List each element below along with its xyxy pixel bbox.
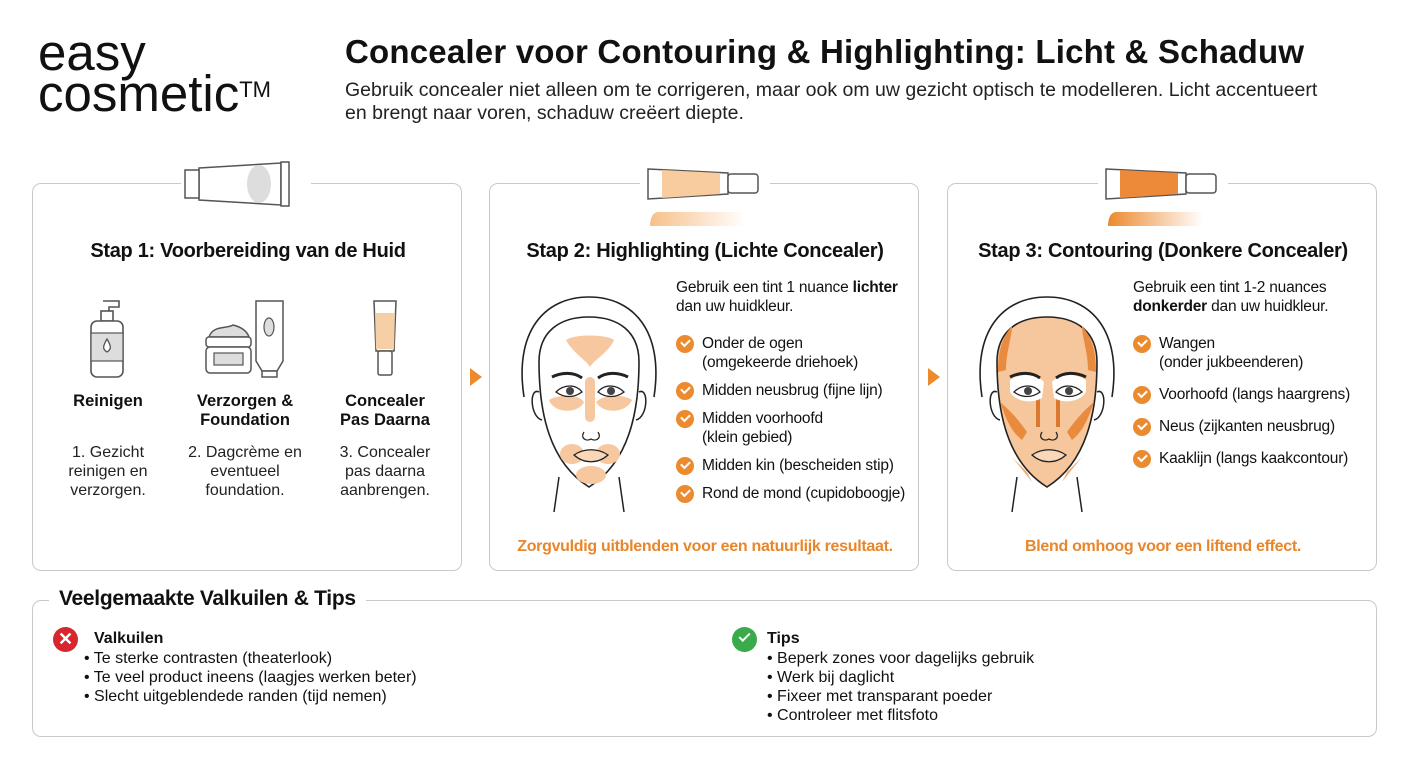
icon: light concealer tube with swatch bbox=[640, 168, 770, 226]
face: highlight zones bbox=[521, 296, 657, 512]
column: verzorgen: foundation. bbox=[205, 482, 285, 499]
panel: pitfalls & tips: Tips bbox=[767, 630, 800, 647]
footer note: Zorgvuldig uitblenden voor een natuurlijk resultaat. bbox=[517, 538, 893, 555]
panel: step 3: (onder jukbeenderen) bbox=[1159, 354, 1303, 371]
panel: step 2 bbox=[489, 183, 919, 571]
heading: Stap 1: Voorbereiding van de Huid bbox=[90, 240, 406, 262]
column: reinigen: verzorgen. bbox=[70, 482, 146, 499]
icon: green check bbox=[732, 627, 757, 652]
column: reinigen bbox=[68, 392, 148, 499]
panel: step 1 bbox=[32, 183, 462, 571]
panel: pitfalls & tips bbox=[32, 600, 1377, 737]
panel: pitfalls & tips: • Te veel product ineens (laagjes werken beter) bbox=[84, 669, 417, 686]
column: verzorgen bbox=[188, 392, 302, 499]
icon: red x bbox=[53, 627, 78, 652]
panel: step 2: Midden kin (bescheiden stip) bbox=[702, 457, 894, 474]
column: verzorgen: Foundation bbox=[200, 411, 290, 429]
panel: step 3: Neus (zijkanten neusbrug) bbox=[1159, 418, 1335, 435]
panel: pitfalls & tips: • Beperk zones voor dagelijks gebruik bbox=[767, 650, 1034, 667]
heading: Stap 2: Highlighting (Lichte Concealer) bbox=[526, 240, 884, 262]
column: concealer: aanbrengen. bbox=[340, 482, 430, 499]
text: intro: dan uw huidkleur. bbox=[676, 298, 793, 315]
block: tips bbox=[732, 627, 1034, 724]
panel: pitfalls & tips: • Fixeer met transparant poeder bbox=[767, 688, 992, 705]
text: intro: donkerder dan uw huidkleur. bbox=[1133, 298, 1328, 315]
panel: pitfalls & tips: • Controleer met flitsfoto bbox=[767, 707, 938, 724]
heading: Stap 3: Contouring (Donkere Concealer) bbox=[978, 240, 1348, 262]
footer note: Blend omhoog voor een liftend effect. bbox=[1025, 538, 1301, 555]
column: reinigen: 1. Gezicht bbox=[72, 444, 144, 461]
panel: pitfalls & tips: • Te sterke contrasten (theaterlook) bbox=[84, 650, 332, 667]
title: Concealer voor Contouring & Highlighting: Licht & Schaduw bbox=[345, 33, 1304, 70]
subtitle: en brengt naar voren, schaduw creëert diepte. bbox=[345, 102, 744, 124]
column: reinigen: reinigen en bbox=[68, 463, 148, 480]
icon: cream jar and tube bbox=[205, 300, 284, 378]
column: verzorgen: Verzorgen & bbox=[197, 392, 293, 410]
column: concealer: Pas Daarna bbox=[340, 411, 430, 429]
text: intro: Gebruik een tint 1 nuance lichter bbox=[676, 279, 898, 296]
panel: step 2: Onder de ogen bbox=[702, 335, 803, 352]
block: valkuilen bbox=[53, 627, 417, 705]
panel: pitfalls & tips: Valkuilen bbox=[94, 630, 163, 647]
panel: step 3: Voorhoofd (langs haargrens) bbox=[1159, 386, 1350, 403]
logo bbox=[38, 24, 271, 122]
icon: red x: ✕ bbox=[58, 629, 73, 649]
list: contour zones bbox=[1133, 335, 1350, 468]
column: verzorgen: eventueel bbox=[210, 463, 280, 480]
panel: step 3 bbox=[947, 183, 1377, 571]
column: verzorgen: 2. Dagcrème en bbox=[188, 444, 302, 461]
icon: dark concealer tube with swatch bbox=[1098, 168, 1228, 226]
text: intro bbox=[1133, 279, 1328, 315]
panel: step 2: (klein gebied) bbox=[702, 429, 792, 446]
icon: white tube bbox=[181, 161, 311, 207]
panel: pitfalls & tips: • Slecht uitgeblendede randen (tijd nemen) bbox=[84, 688, 387, 705]
heading: Veelgemaakte Valkuilen & Tips bbox=[59, 587, 356, 610]
subtitle: Gebruik concealer niet alleen om te corrigeren, maar ook om uw gezicht optisch te modelleren. Licht accentueert bbox=[345, 79, 1317, 101]
text: intro: Gebruik een tint 1-2 nuances bbox=[1133, 279, 1326, 296]
column: concealer: pas daarna bbox=[345, 463, 425, 480]
panel: step 2: (omgekeerde driehoek) bbox=[702, 354, 858, 371]
icon: concealer tube bbox=[373, 300, 397, 376]
panel: step 3: Kaaklijn (langs kaakcontour) bbox=[1159, 450, 1348, 467]
arrow 2 bbox=[928, 368, 940, 386]
logo: easy bbox=[38, 24, 146, 81]
column: concealer: Concealer bbox=[345, 392, 425, 410]
subtitle bbox=[345, 79, 1318, 124]
arrow 1 bbox=[470, 368, 482, 386]
panel: step 2: Midden voorhoofd bbox=[702, 410, 823, 427]
text: intro bbox=[676, 279, 898, 315]
logo: cosmeticTM bbox=[38, 65, 271, 122]
column: concealer bbox=[340, 392, 430, 499]
face: contour zones bbox=[979, 296, 1115, 512]
panel: pitfalls & tips: • Werk bij daglicht bbox=[767, 669, 894, 686]
icon: cleanser bottle bbox=[90, 300, 124, 378]
column: concealer: 3. Concealer bbox=[340, 444, 430, 461]
panel: step 2: Midden neusbrug (fijne lijn) bbox=[702, 382, 882, 399]
panel: step 2: Rond de mond (cupidoboogje) bbox=[702, 485, 905, 502]
column: reinigen: Reinigen bbox=[73, 392, 143, 410]
list: highlight zones bbox=[676, 335, 905, 503]
panel: step 3: Wangen bbox=[1159, 335, 1215, 352]
